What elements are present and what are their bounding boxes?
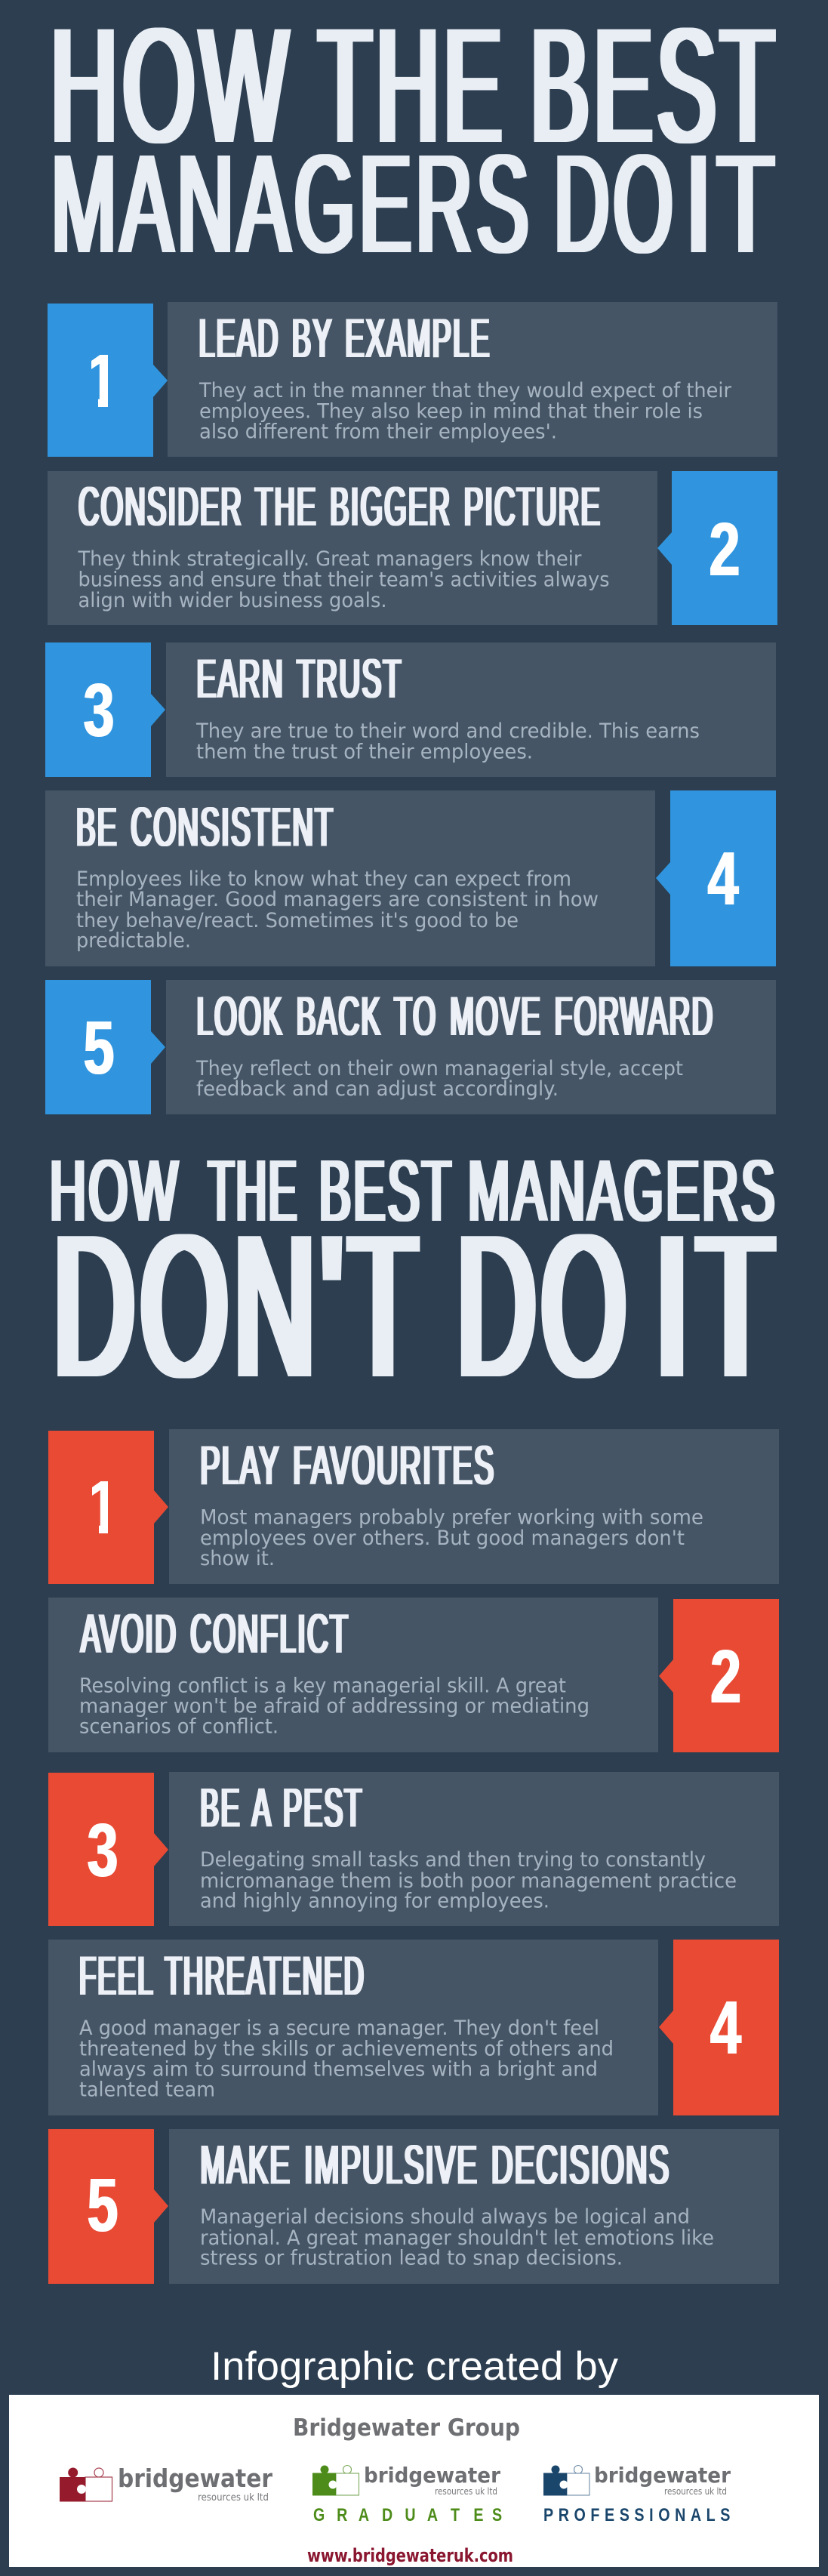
body text: always aim to surround themselves with a bright and (79, 2058, 598, 2081)
body text: Resolving conflict is a key managerial skill. A great (79, 1675, 566, 1697)
footer heading: Infographic created by (211, 2344, 619, 2389)
title: how the best managers don't do it: DON'T (54, 1193, 423, 1420)
number tab with arrow (45, 642, 165, 777)
panel (166, 980, 776, 1114)
body text: their Manager. Good managers are consistent in how (76, 888, 599, 911)
logo: bridgewater professionals (543, 2463, 735, 2525)
body text: talented team (79, 2078, 215, 2102)
panel (166, 642, 776, 777)
logo: bridgewater graduates: GRADUATES (313, 2504, 502, 2525)
body text: employees over others. But good managers don't (200, 1527, 685, 1550)
body text (79, 1675, 589, 1738)
title: how the best managers don't do it: HOW (50, 1142, 180, 1240)
number tab with arrow (656, 790, 776, 966)
body text: Most managers probably prefer working with some (200, 1505, 703, 1530)
number tab with arrow (657, 471, 777, 625)
title: how the best managers do it: IT (685, 126, 780, 282)
body text: align with wider business goals. (78, 589, 386, 612)
body text (199, 379, 732, 444)
logo: bridgewater resources: resources uk ltd (198, 2492, 269, 2504)
body text: They reflect on their own managerial style, accept (195, 1057, 683, 1080)
heading: AVOID CONFLICT (81, 1604, 349, 1665)
number: 5 (88, 2163, 118, 2248)
group name: Bridgewater Group (293, 2414, 520, 2442)
panel (169, 1772, 779, 1926)
body text (79, 2017, 614, 2102)
body text: They act in the manner that they would expect of their (199, 379, 732, 402)
body text: A good manager is a secure manager. They don't feel (79, 2017, 599, 2040)
icon: puzzle (60, 2467, 112, 2502)
title: how the best managers don't do it: DO (457, 1193, 632, 1420)
title: how the best managers do it (51, 0, 780, 282)
icon: puzzle (543, 2466, 589, 2496)
body text: and highly annoying for employees. (200, 1889, 549, 1913)
body text: manager won't be afraid of addressing or mediating (79, 1694, 589, 1718)
logo: bridgewater resources: bridgewater (118, 2464, 273, 2493)
panel (48, 1598, 658, 1752)
number: 2 (710, 1635, 741, 1719)
number tab with arrow (48, 304, 168, 457)
logo: bridgewater graduates (312, 2463, 502, 2525)
item: make impulsive decisions (48, 2129, 779, 2284)
number: 5 (83, 1006, 115, 1090)
body text: threatened by the skills or achievements of others and (79, 2037, 614, 2061)
body text (200, 1848, 737, 1913)
number tab with arrow (659, 1599, 779, 1752)
body text (200, 2205, 714, 2269)
number: 4 (710, 1986, 741, 2070)
title: how the best managers do it: DO (554, 126, 677, 282)
body text: stress or frustration lead to snap decisions. (200, 2247, 623, 2269)
logo: bridgewater resources (60, 2464, 273, 2504)
number: 3 (83, 668, 115, 753)
heading: BE A PEST (200, 1777, 363, 1839)
item: be a pest (48, 1772, 779, 1926)
logo: bridgewater graduates: resources uk ltd (435, 2486, 497, 2497)
body text: predictable. (76, 929, 191, 953)
body text: employees. They also keep in mind that their role is (199, 400, 703, 423)
item: earn trust (45, 642, 776, 777)
panel (48, 1940, 658, 2115)
number tab with arrow (659, 1940, 779, 2115)
body text: They are true to their word and credible. This earns (195, 719, 700, 743)
body text: them the trust of their employees. (196, 740, 533, 764)
item: be consistent (45, 790, 776, 966)
logo: bridgewater graduates: bridgewater (364, 2463, 500, 2488)
body text: Employees like to know what they can expect from (76, 867, 571, 891)
number: 1 (84, 1465, 123, 1550)
title: how the best managers don't do it: THE (208, 1142, 299, 1240)
heading: EARN TRUST (196, 649, 403, 710)
body text: They think strategically. Great managers know their (78, 547, 582, 571)
number: 4 (708, 837, 739, 921)
item: look back to move forward (45, 980, 776, 1114)
body text: micromanage them is both poor management practice (200, 1869, 737, 1893)
body text (195, 719, 700, 764)
number: 3 (88, 1808, 118, 1893)
body text (195, 1057, 683, 1101)
body text: show it. (200, 1547, 275, 1570)
body text: Managerial decisions should always be logical and (200, 2205, 690, 2229)
item: lead by example (48, 302, 777, 457)
number tab with arrow (48, 1431, 168, 1584)
heading: BE CONSISTENT (76, 797, 334, 858)
body text: feedback and can adjust accordingly. (196, 1077, 559, 1101)
panel (168, 302, 777, 457)
number tab with arrow (45, 980, 165, 1114)
number tab with arrow (48, 1773, 168, 1926)
body text (200, 1505, 703, 1570)
body text (78, 547, 610, 612)
icon: puzzle (312, 2466, 359, 2496)
body text: rational. A great manager shouldn't let emotions like (200, 2226, 714, 2250)
panel (45, 790, 655, 966)
logo: bridgewater professionals: resources uk ltd (664, 2486, 727, 2497)
body text: Delegating small tasks and then trying to constantly (200, 1848, 706, 1872)
heading: PLAY FAVOURITES (200, 1435, 495, 1496)
website url: www.bridgewateruk.com (307, 2545, 513, 2566)
body text (76, 867, 599, 953)
panel (169, 1429, 779, 1584)
logo: bridgewater professionals: bridgewater (594, 2463, 731, 2488)
body text: they behave/react. Sometimes it's good to be (76, 909, 519, 932)
item: consider the bigger picture (48, 471, 777, 625)
body text: business and ensure that their team's activities always (78, 568, 610, 592)
panel (169, 2129, 779, 2284)
item: play favourites (48, 1429, 779, 1584)
footer panel (9, 2395, 819, 2567)
body text: scenarios of conflict. (79, 1715, 279, 1738)
number: 2 (709, 507, 740, 592)
item: feel threatened: FEEL THREATENED (79, 1946, 365, 2007)
logo: bridgewater professionals: PROFESSIONALS (543, 2505, 735, 2525)
number tab with arrow (48, 2129, 168, 2284)
heading: LEAD BY EXAMPLE (199, 308, 491, 369)
number: 1 (83, 339, 122, 424)
panel (48, 471, 657, 625)
body text: also different from their employees'. (199, 420, 557, 444)
title: how the best managers don't do it: BEST (319, 1142, 454, 1240)
item: feel threatened (48, 1940, 779, 2115)
item: avoid conflict (48, 1598, 779, 1752)
